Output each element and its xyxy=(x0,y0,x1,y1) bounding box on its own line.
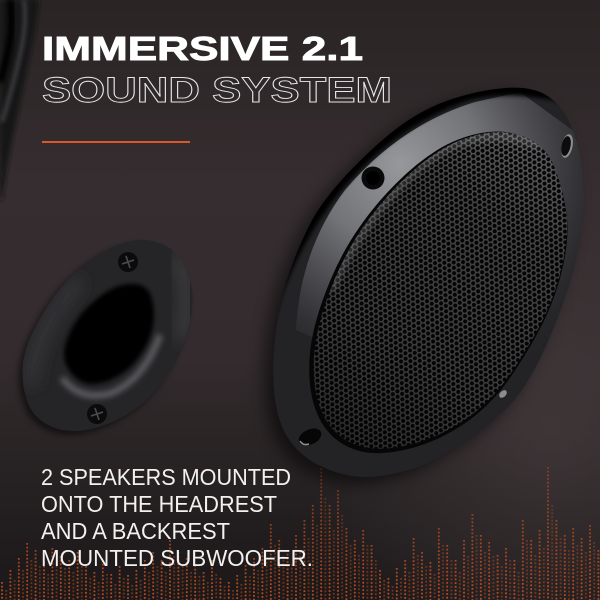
mounting hole upper right xyxy=(559,133,575,159)
headrest seam folds xyxy=(0,0,39,200)
port flange xyxy=(22,240,192,431)
body text xyxy=(41,464,313,571)
mounting hole upper left xyxy=(362,166,384,190)
title line 1: IMMERSIVE 2.1 xyxy=(42,31,363,68)
orange divider rule xyxy=(42,141,190,143)
body text: AND A BACKREST xyxy=(41,518,230,544)
speaker outer rim xyxy=(273,88,584,477)
title line 2 outlined: SOUND SYSTEM xyxy=(42,71,392,110)
icon: upper port screw xyxy=(118,252,138,272)
port lower lip highlight xyxy=(62,335,160,395)
body text: 2 SPEAKERS MOUNTED xyxy=(41,464,291,490)
icon: speaker xyxy=(260,60,600,484)
icon: subwoofer port xyxy=(17,240,192,436)
body text: ONTO THE HEADREST xyxy=(41,491,277,517)
body text: MOUNTED SUBWOOFER. xyxy=(41,545,313,571)
mounting hole lower left xyxy=(296,425,324,449)
mounting hole lower right xyxy=(498,389,508,399)
bright dot columns xyxy=(2,467,598,600)
icon: lower port screw xyxy=(87,404,107,424)
port opening xyxy=(64,284,154,384)
speaker metal ring xyxy=(281,88,584,337)
title xyxy=(42,31,392,110)
speaker grille xyxy=(309,132,568,454)
dim dot columns xyxy=(6,498,594,600)
equalizer dot pattern xyxy=(2,467,598,600)
